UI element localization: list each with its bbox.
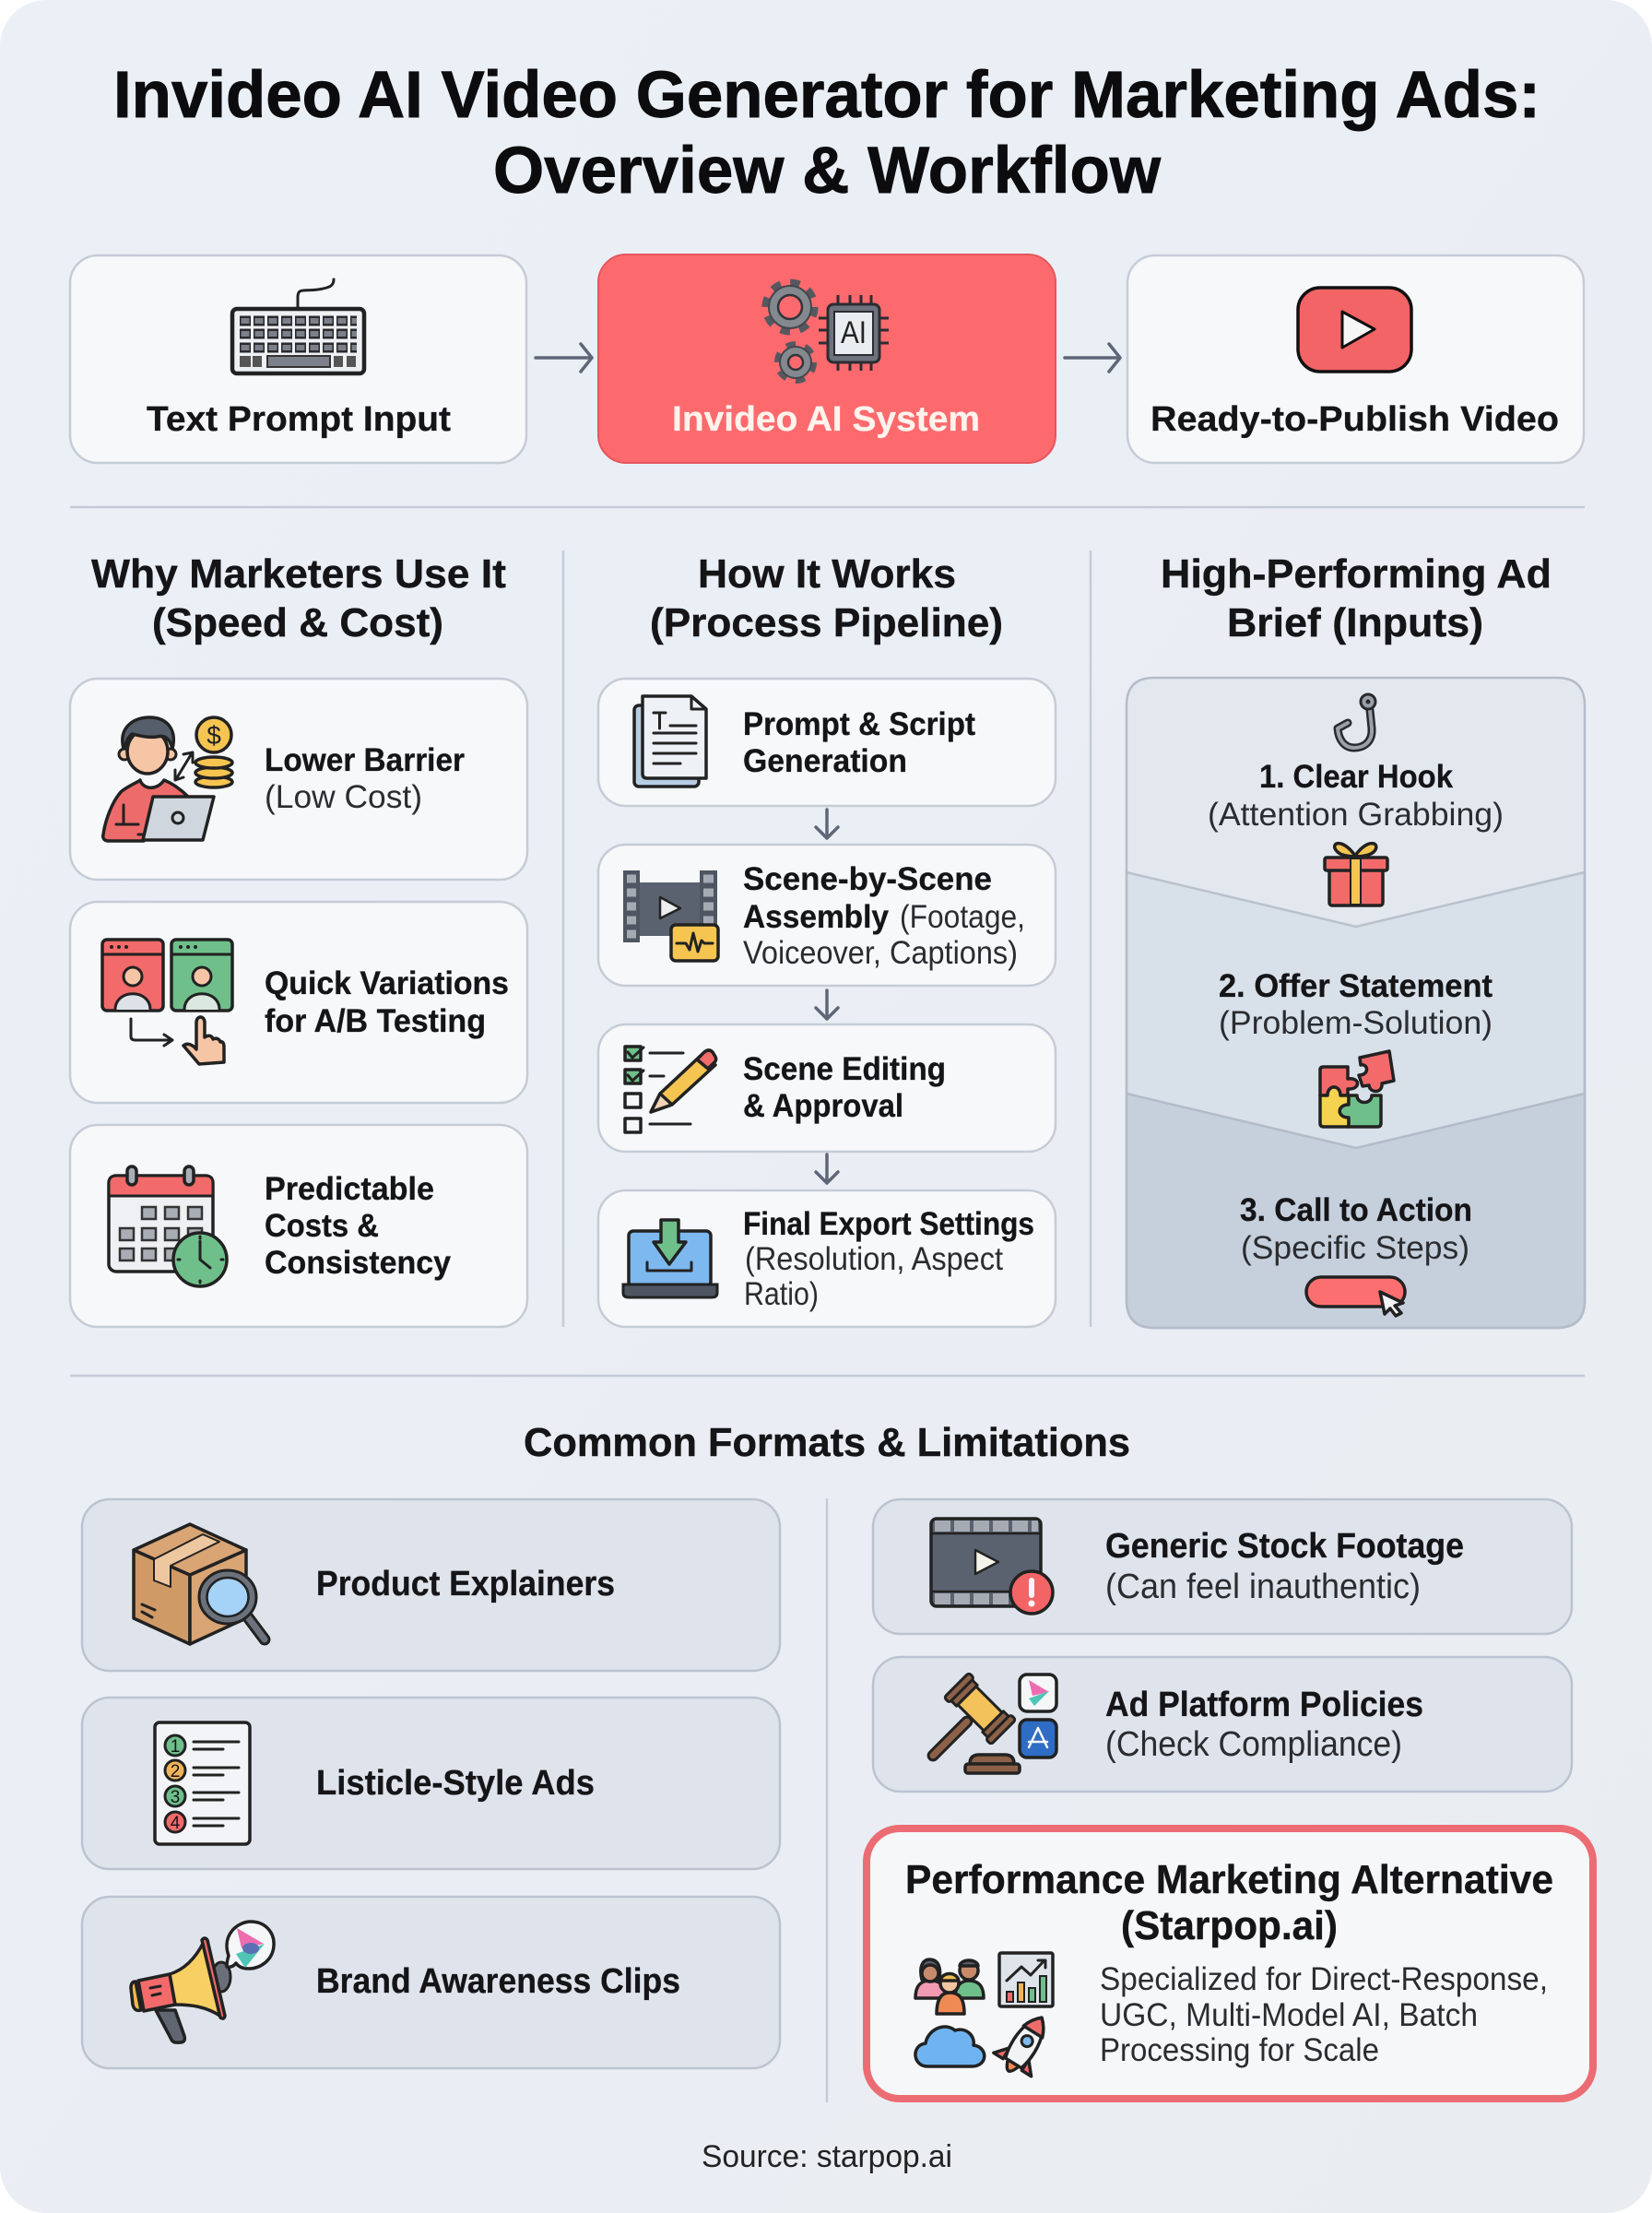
callout: performance marketing alternative <box>867 1828 1593 2099</box>
panel: ready-to-publish video <box>1127 255 1584 463</box>
label <box>1105 1527 1464 1606</box>
label: Costs & <box>265 1208 379 1244</box>
title: Overview & Workflow <box>493 135 1162 207</box>
label: Brand Awareness Clips <box>316 1962 680 2001</box>
icon: gift <box>1325 844 1387 905</box>
arrow: down 2 <box>816 990 838 1019</box>
label <box>743 1206 1034 1312</box>
step 1 text: 1. Clear Hook <box>1259 759 1453 795</box>
panel: scene editing <box>598 1024 1056 1152</box>
icon: numbered list: 4 <box>171 1814 181 1833</box>
step 2 text: (Problem-Solution) <box>1219 1005 1493 1041</box>
icon: numbered list: 1 <box>171 1737 180 1757</box>
arrow: input to system <box>536 344 592 372</box>
heading: ad brief <box>1161 551 1552 645</box>
label: Final Export Settings <box>743 1206 1034 1242</box>
panel: scene assembly <box>598 845 1056 986</box>
label: (Resolution, Aspect <box>745 1241 1003 1277</box>
icon: video play button <box>1298 288 1411 372</box>
callout description <box>1100 1961 1548 2068</box>
heading: why marketers: Why Marketers Use It <box>91 551 506 597</box>
label <box>265 742 465 815</box>
icon: gears and AI chip: AI <box>841 315 867 350</box>
heading: formats and limitations: Common Formats & Limitations <box>524 1420 1130 1465</box>
heading: how it works: How It Works <box>698 551 956 597</box>
callout description: UGC, Multi-Model AI, Batch <box>1100 1997 1478 2033</box>
heading: how it works <box>650 551 1003 645</box>
icon: film with alert <box>931 1519 1053 1614</box>
label: (Low Cost) <box>265 779 422 815</box>
heading: ad brief: Brief (Inputs) <box>1227 600 1483 645</box>
panel: brand awareness <box>82 1897 780 2068</box>
icon: A/B windows with pointer <box>102 940 232 1064</box>
label: for A/B Testing <box>265 1003 486 1039</box>
panel: ad platform policies <box>873 1657 1572 1792</box>
label: Voiceover, Captions) <box>743 935 1018 971</box>
arrow: system to video <box>1065 344 1120 372</box>
icon: person with laptop and coins <box>103 717 232 841</box>
icon: calendar and clock <box>109 1166 227 1286</box>
panel: generic stock footage <box>873 1499 1572 1634</box>
label: Invideo AI System <box>672 400 980 439</box>
label: Scene Editing <box>743 1051 946 1087</box>
panel: prompt and script <box>598 679 1056 806</box>
panel: text prompt input <box>70 255 526 463</box>
step 2 text: 2. Offer Statement <box>1219 968 1493 1004</box>
icon: box with magnifier <box>134 1524 265 1644</box>
label <box>743 861 1025 971</box>
label <box>265 965 509 1039</box>
icon: checklist and pencil <box>625 1047 716 1132</box>
label: Ratio) <box>744 1276 819 1312</box>
label: (Footage, <box>900 899 1025 935</box>
source note: Source: starpop.ai <box>702 2139 952 2174</box>
icon: keyboard <box>232 279 364 373</box>
icon: film strip with audio <box>623 870 718 961</box>
label: Text Prompt Input <box>147 400 451 439</box>
step 3 text: 3. Call to Action <box>1240 1192 1472 1228</box>
icon: numbered list: 2 <box>171 1762 180 1781</box>
label: Product Explainers <box>316 1565 615 1604</box>
callout heading: Performance Marketing Alternative <box>905 1857 1553 1902</box>
icon: laptop with download <box>623 1220 717 1297</box>
arrow: down 3 <box>816 1154 838 1183</box>
step 1 text: (Attention Grabbing) <box>1208 797 1504 833</box>
icon: hook <box>1338 694 1375 748</box>
title: Invideo AI Video Generator for Marketing Ads: <box>113 59 1540 132</box>
title <box>113 59 1540 207</box>
label: Scene-by-Scene <box>743 861 992 897</box>
step 3 text <box>1240 1192 1472 1266</box>
label: & Approval <box>743 1088 903 1124</box>
heading: why marketers: (Speed & Cost) <box>152 600 443 645</box>
label: Consistency <box>265 1245 452 1281</box>
label: (Check Compliance) <box>1105 1725 1402 1764</box>
callout heading: (Starpop.ai) <box>1121 1903 1338 1948</box>
panel: listicle ads <box>82 1698 780 1869</box>
label: Generation <box>743 743 907 779</box>
label <box>743 1051 946 1124</box>
icon: gavel and app tiles <box>906 1673 1056 1782</box>
icon: numbered list: 3 <box>171 1788 180 1807</box>
label: Generic Stock Footage <box>1105 1527 1464 1566</box>
label: Ready-to-Publish Video <box>1150 400 1559 439</box>
icon: document <box>634 696 706 787</box>
label: (Can feel inauthentic) <box>1105 1568 1421 1606</box>
arrow: down 1 <box>816 810 838 838</box>
label: Assembly <box>743 899 889 935</box>
panel: final export <box>598 1190 1056 1327</box>
icon: megaphone with logo bubble <box>131 1922 274 2042</box>
label <box>1105 1686 1423 1764</box>
panel: lower barrier <box>70 679 527 880</box>
callout description: Processing for Scale <box>1100 2032 1379 2068</box>
label: Ad Platform Policies <box>1105 1686 1423 1724</box>
label <box>743 706 975 779</box>
callout heading <box>905 1857 1553 1948</box>
heading: ad brief: High-Performing Ad <box>1161 551 1552 597</box>
icon: numbered list <box>155 1722 250 1844</box>
panel: quick variations <box>70 902 527 1103</box>
panel: invideo AI system <box>598 254 1056 463</box>
label: Lower Barrier <box>265 742 465 778</box>
label: Listicle-Style Ads <box>316 1764 595 1803</box>
icon: puzzle <box>1320 1051 1394 1127</box>
panel: ad brief funnel <box>1127 678 1585 1328</box>
icon: growth chart <box>999 1953 1053 2006</box>
label <box>265 1171 452 1281</box>
heading: why marketers <box>91 551 506 645</box>
label: Prompt & Script <box>743 706 975 742</box>
icon: CTA button with cursor <box>1306 1277 1405 1316</box>
step 3 text: (Specific Steps) <box>1241 1230 1469 1266</box>
label: Quick Variations <box>265 965 509 1001</box>
label: Predictable <box>265 1171 434 1207</box>
icon: people <box>915 1959 984 2014</box>
icon: rocket <box>990 2006 1060 2083</box>
step 2 text <box>1219 968 1493 1041</box>
icon: cloud <box>915 2027 985 2066</box>
panel: product explainers <box>82 1499 780 1671</box>
callout description: Specialized for Direct-Response, <box>1100 1961 1548 1997</box>
icon: gears and AI chip <box>765 282 889 381</box>
icon: person with laptop and coins: $ <box>206 721 221 750</box>
step 1 text <box>1208 759 1504 833</box>
panel: predictable costs <box>70 1125 527 1327</box>
heading: how it works: (Process Pipeline) <box>650 600 1003 645</box>
